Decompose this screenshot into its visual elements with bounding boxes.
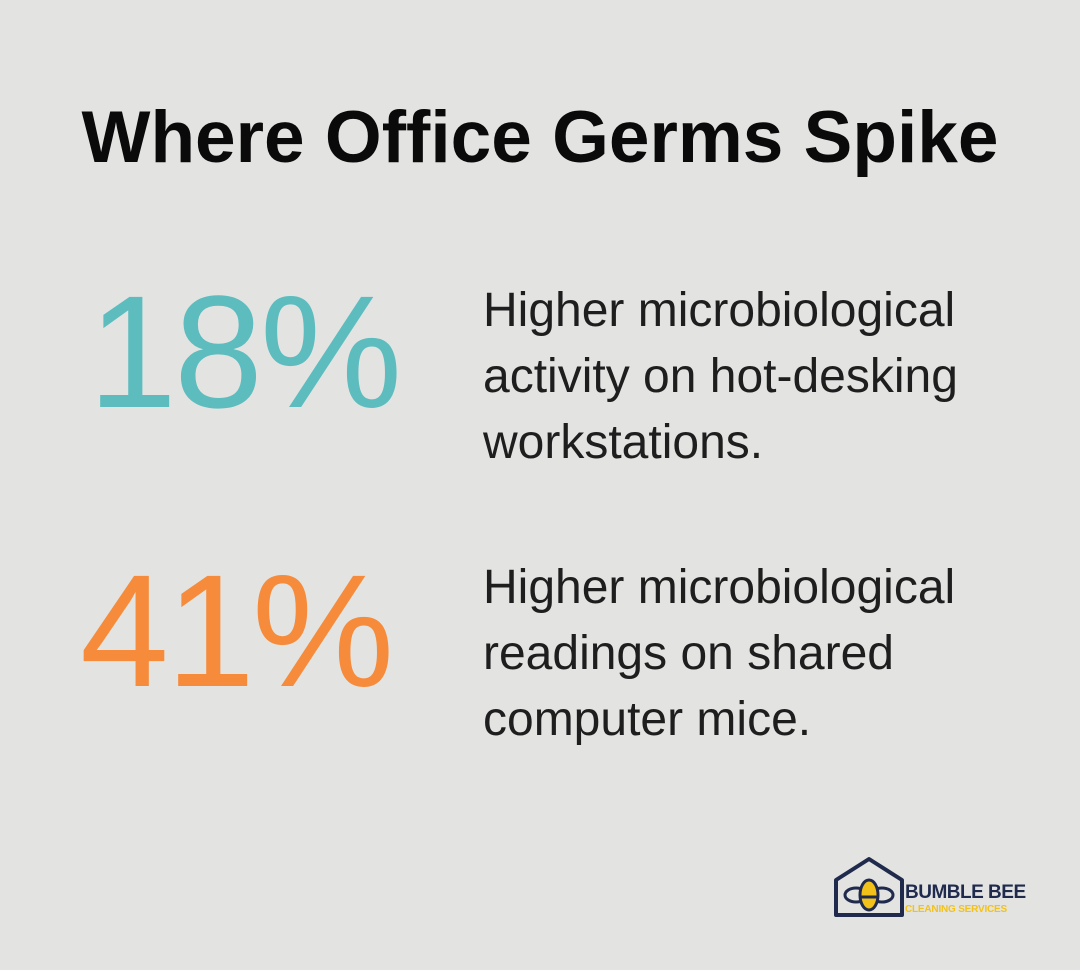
description: 41%: readings on shared: [483, 627, 894, 680]
stat: 41%: 41%: [80, 541, 391, 720]
title: Where Office Germs Spike: [82, 97, 998, 178]
description: 18%: activity on hot-desking: [483, 350, 958, 403]
description: 41%: Higher microbiological: [483, 561, 955, 614]
description: 41%: [483, 561, 955, 746]
stat: 18%: 18%: [88, 262, 399, 441]
description: 18%: Higher microbiological: [483, 284, 955, 337]
logo: CLEANING SERVICES: [905, 904, 1007, 915]
logo: [834, 857, 1026, 917]
icon: house with bee: [834, 857, 904, 917]
logo text: BUMBLE BEE: [905, 882, 1026, 903]
description: 18%: [483, 284, 958, 469]
description: 41%: computer mice.: [483, 693, 811, 746]
description: 18%: workstations.: [483, 416, 763, 469]
